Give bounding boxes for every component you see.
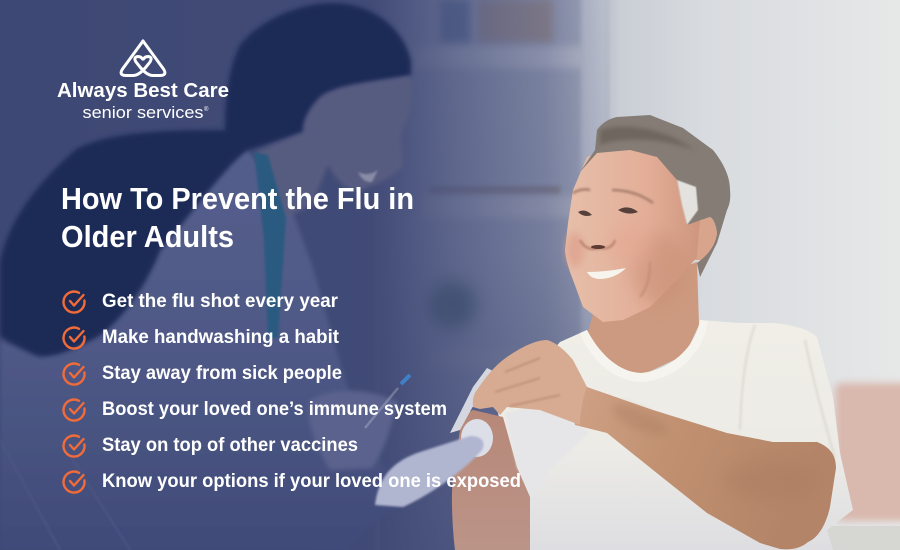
gloved doctor hand: [375, 436, 484, 507]
doctor hand holding syringe: [309, 391, 398, 470]
brows: [573, 189, 653, 203]
title: [61, 181, 414, 254]
hair: [580, 115, 730, 277]
ear: [690, 217, 717, 260]
t-shirt: [498, 320, 853, 550]
checklist: [64, 290, 521, 493]
photo: doctor: [0, 3, 412, 550]
title: Older Adults: [61, 219, 234, 254]
item 6: Know your options if your loved one is exposed: [102, 470, 521, 492]
item 5: Stay on top of other vaccines: [102, 434, 358, 456]
gauze: [461, 419, 493, 457]
item 4: Boost your loved one’s immune system: [102, 398, 447, 420]
syringe: [365, 375, 410, 428]
face: [565, 148, 700, 322]
logo tagline: senior services: [82, 104, 204, 122]
item 1: Get the flu shot every year: [102, 290, 338, 312]
navy overlay: [0, 0, 620, 550]
scrubs: [254, 152, 286, 338]
doctor coat: [0, 147, 405, 550]
smile: [587, 268, 626, 279]
logo: [57, 41, 229, 122]
doctor hair: [0, 3, 411, 356]
vaccinated upper arm: [452, 410, 530, 550]
grey temple hair: [677, 180, 698, 225]
nose: [580, 240, 615, 249]
pink cushion: [835, 383, 900, 521]
photo: senior man: [375, 115, 853, 550]
title: How To Prevent the Flu in: [61, 181, 414, 216]
hand on shoulder: [473, 340, 587, 425]
forearm: [560, 358, 836, 549]
logo wordmark: Always Best Care: [57, 79, 229, 102]
eyes: [578, 207, 638, 216]
item 2: Make handwashing a habit: [102, 326, 339, 348]
item 3: Stay away from sick people: [102, 362, 342, 384]
neck: [585, 262, 699, 376]
registered mark: ®: [204, 106, 209, 113]
doctor face: [256, 76, 412, 218]
pulled sleeve: [450, 368, 495, 433]
icon: logo house and heart: [121, 41, 165, 76]
